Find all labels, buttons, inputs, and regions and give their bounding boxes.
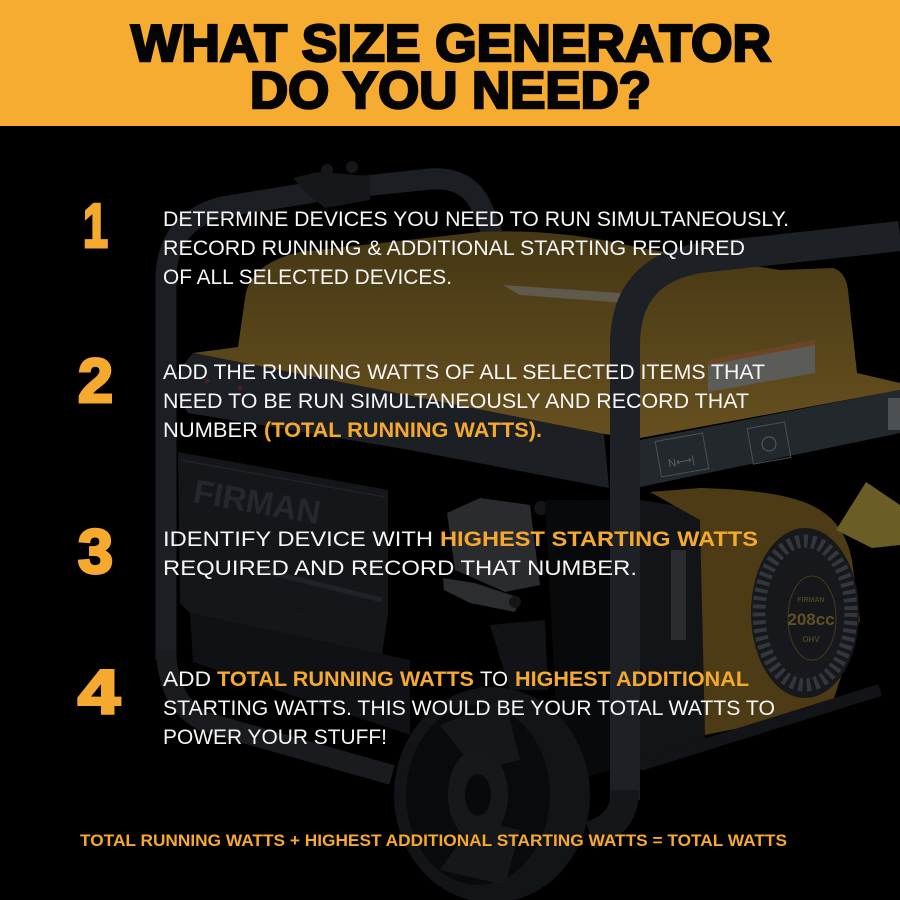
- engine data plate: [671, 550, 686, 640]
- title line 2: DO YOU NEED?: [250, 62, 651, 120]
- step 1: [83, 192, 789, 289]
- number 4: 4: [78, 658, 121, 727]
- step 3 text: [163, 528, 758, 580]
- formula: TOTAL RUNNING WATTS + HIGHEST ADDITIONAL STARTING WATTS = TOTAL WATTS: [80, 831, 787, 850]
- title banner: [0, 0, 900, 126]
- step 3: [78, 518, 758, 587]
- side engine block: [640, 500, 705, 770]
- step 2 text: ADD THE RUNNING WATTS OF ALL SELECTED ITEMS THAT: [163, 361, 765, 384]
- front tube bottom: [590, 790, 625, 835]
- yellow fuel tank: [193, 231, 900, 438]
- step 4 text: TOTAL RUNNING WATTS: [217, 668, 474, 691]
- step 3 text: HIGHEST STARTING WATTS: [440, 528, 758, 551]
- step 1 text: OF ALL SELECTED DEVICES.: [163, 266, 452, 289]
- yellow recoil handle: [836, 482, 900, 548]
- dimmed generator photo: [166, 161, 900, 900]
- recoil starter cover: 208cc: [787, 610, 835, 629]
- step 2 text: NUMBER: [163, 419, 258, 442]
- lower frame rail: [166, 650, 392, 775]
- lower side panel: [190, 613, 410, 735]
- recoil starter cover: FIRMAN: [797, 597, 825, 604]
- wheel: [394, 687, 590, 900]
- step 3 text: IDENTIFY DEVICE WITH: [163, 528, 433, 551]
- recoil starter cover: OHV: [802, 635, 820, 644]
- step 4 text: TO: [480, 668, 508, 691]
- rear frame tube: [166, 179, 494, 660]
- front frame tube: [625, 236, 900, 800]
- handle clamp: [293, 161, 370, 208]
- yellow engine housing: [650, 488, 860, 735]
- number 1: 1: [83, 192, 108, 261]
- step 4 text: HIGHEST ADDITIONAL: [515, 668, 749, 691]
- step 2 text: [163, 361, 765, 442]
- strip indicators: [204, 378, 242, 390]
- recoil starter cover: [751, 528, 859, 698]
- right lower rail: [640, 690, 880, 765]
- right control panel strip: N⟷|: [667, 454, 696, 470]
- right control panel strip: [640, 390, 900, 487]
- step 4 text: STARTING WATTS. THIS WOULD BE YOUR TOTAL WATTS TO: [163, 697, 775, 720]
- title line 1: WHAT SIZE GENERATOR: [131, 15, 771, 73]
- outlet block: [443, 498, 548, 690]
- step 1 text: RECORD RUNNING & ADDITIONAL STARTING REQUIRED: [163, 237, 745, 260]
- step 3 text: REQUIRED AND RECORD THAT NUMBER.: [163, 557, 637, 580]
- tank label: [708, 340, 815, 392]
- step 4: [78, 658, 775, 749]
- step 4 text: [163, 668, 775, 749]
- step 1 text: DETERMINE DEVICES YOU NEED TO RUN SIMULTANEOUSLY.: [163, 208, 789, 231]
- step 4 text: POWER YOUR STUFF!: [163, 726, 387, 749]
- step 1 text: [163, 208, 789, 289]
- tank highlight: [503, 285, 625, 303]
- left control strip: [169, 353, 609, 488]
- side panel with brand: [178, 452, 388, 655]
- number 3: 3: [78, 518, 113, 587]
- number 2: 2: [78, 347, 113, 416]
- side panel with brand: FIRMAN: [191, 472, 324, 531]
- engine block: [545, 500, 610, 785]
- step 2: [78, 347, 765, 442]
- step 4 text: ADD: [163, 668, 211, 691]
- step 2 text: NEED TO BE RUN SIMULTANEOUSLY AND RECORD THAT: [163, 390, 749, 413]
- step 2 text: (TOTAL RUNNING WATTS).: [264, 419, 542, 442]
